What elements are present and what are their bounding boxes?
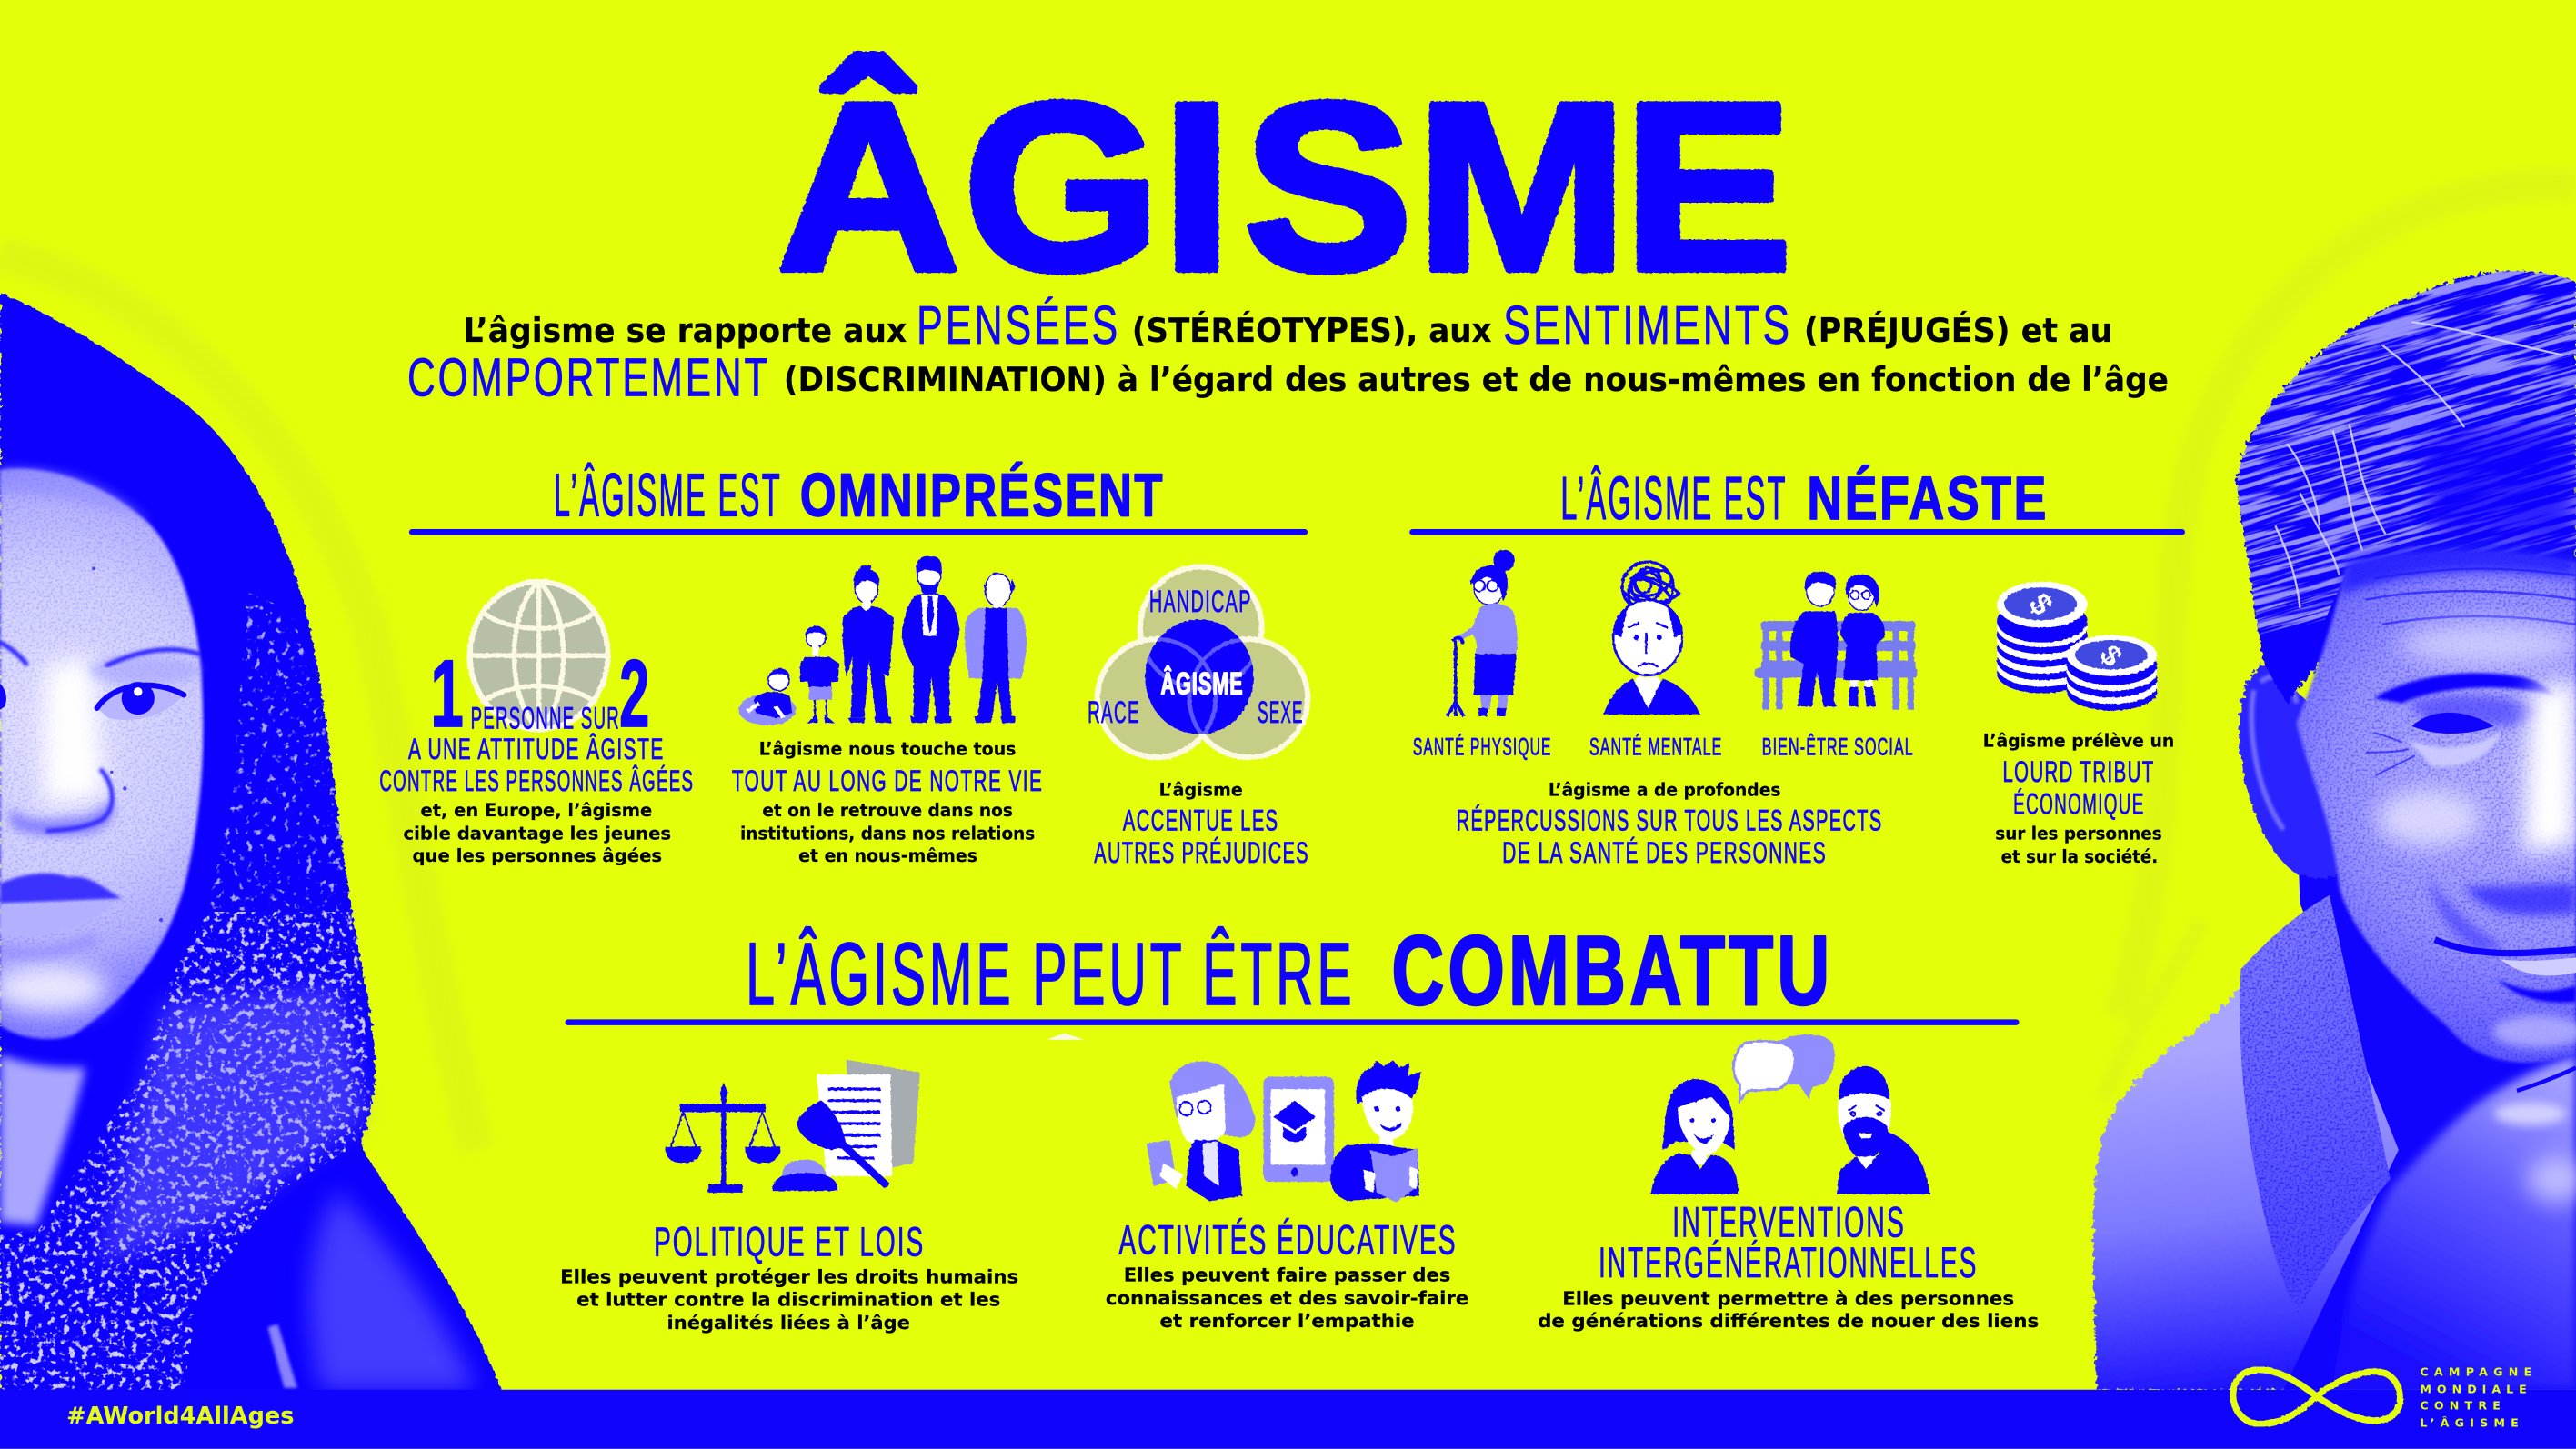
text: economic toll: LOURD TRIBUT (2002, 755, 2155, 788)
smile fold (2428, 877, 2504, 953)
heading: harmful: NÉFASTE (1807, 465, 2049, 533)
eye glint (134, 687, 142, 696)
health labels: SANTÉ MENTALE (1589, 732, 1722, 760)
text: lifelong (732, 738, 1043, 866)
text: intersects other prejudices (1094, 780, 1309, 869)
text: profound impact: L’âgisme a de profondes (1549, 780, 1781, 801)
stat: 1 person in 2: que les personnes âgées (412, 845, 662, 866)
health labels: BIEN-ÊTRE SOCIAL (1762, 732, 1914, 760)
heading: omnipresent: OMNIPRÉSENT (800, 462, 1165, 530)
column: educational activities: Elles peuvent faire passer des (1124, 1264, 1450, 1285)
stat: 1 person in 2: 2 (619, 641, 652, 747)
left eye fragment (0, 684, 6, 710)
nose wing outline (46, 769, 112, 831)
venn diagram: ÂGISME (1160, 665, 1244, 702)
baby (738, 668, 796, 725)
eye socket shade (89, 655, 200, 685)
jacket sheen (309, 1191, 476, 1390)
scarf sheen (98, 985, 365, 1264)
gavel (772, 1101, 887, 1191)
text: lifelong: et on le retrouve dans nos (762, 800, 1013, 821)
text: intersects other prejudices: AUTRES PRÉJUDICES (1094, 836, 1309, 869)
stat: 1 person in 2: cible davantage les jeunes (404, 823, 671, 844)
under-nose shadow (10, 798, 115, 836)
lapel (2240, 895, 2391, 1314)
title: ÂGISME (777, 52, 1792, 321)
column: policy and law: Elles peuvent protéger les droits humains (560, 1265, 1018, 1287)
hair dark crown shade (2415, 423, 2576, 550)
intro text block: COMPORTEMENT (407, 347, 770, 408)
text: lifelong: L’âgisme nous touche tous (759, 738, 1016, 759)
column: intergenerational interventions: Elles peuvent permettre à des personnes (1562, 1288, 2014, 1310)
intro text block: (DISCRIMINATION) à l’égard des autres et de nous-mêmes en fonction de l’âge (784, 360, 2169, 399)
icon: scales and gavel (666, 1060, 920, 1193)
eyebrow (2374, 673, 2556, 704)
icon: coin stacks: $ (2021, 586, 2060, 623)
campaign logo: infinity (2233, 1370, 2401, 1424)
text: lifelong: TOUT AU LONG DE NOTRE VIE (732, 764, 1043, 797)
dark base under face and hand (2283, 559, 2576, 1390)
eye bag (2407, 733, 2501, 767)
crow's feet (2366, 733, 2415, 775)
heading: can be combated: L’ÂGISME PEUT ÊTRE (746, 924, 1356, 1024)
column: intergenerational interventions: de générations différentes de nouer des liens (1538, 1310, 2039, 1332)
ear rim (2251, 676, 2297, 830)
stat: 1 person in 2 (379, 641, 694, 866)
intro text block (407, 295, 2169, 408)
icon: coin stacks (1997, 582, 2157, 711)
footer band (0, 1390, 2576, 1449)
icon: physical health (1448, 550, 1518, 716)
campaign logo text: L’ÂGISME (2420, 1415, 2519, 1429)
lavender speech bubble (1768, 1034, 1835, 1099)
text: economic toll: et sur la société. (2001, 846, 2158, 867)
intro text block: PENSÉES (917, 295, 1120, 355)
finger shadow (2517, 1068, 2576, 1091)
icon: education people (1147, 1060, 1421, 1203)
portrait: young woman with scarf (0, 293, 503, 1393)
mouth line (2435, 940, 2576, 954)
collar highlight (268, 1324, 297, 1388)
column: educational activities: connaissances et des savoir-faire (1106, 1287, 1468, 1309)
campaign logo text: MONDIALE (2420, 1382, 2527, 1395)
intro text block: SENTIMENTS (1503, 295, 1792, 355)
stat: 1 person in 2: et, en Europe, l’âgisme (421, 800, 652, 821)
column: intergenerational interventions: INTERVENTIONS (1672, 1198, 1906, 1246)
text: profound impact: DE LA SANTÉ DES PERSONNES (1502, 836, 1827, 869)
eyebrows (0, 643, 199, 665)
stat: 1 person in 2: 1 (430, 641, 466, 747)
venn diagram: RACE (1088, 695, 1140, 730)
text: profound impact (1457, 780, 1883, 869)
health labels (1413, 732, 1914, 760)
hand highlight (2527, 1156, 2576, 1203)
lower lip shadow (2497, 979, 2576, 1003)
column: policy and law: inégalités liées à l’âge (667, 1312, 910, 1334)
lapel weave (2240, 895, 2391, 1314)
brow shade (2407, 695, 2546, 726)
venn diagram (1088, 567, 1308, 757)
column: educational activities: ACTIVITÉS ÉDUCATIVES (1118, 1217, 1458, 1264)
teeth (2501, 958, 2576, 975)
column: intergenerational interventions: INTERGÉNÉRATIONNELLES (1599, 1238, 1978, 1286)
intro text block: (STÉRÉOTYPES), aux (1132, 311, 1492, 350)
hand (2333, 1054, 2576, 1390)
back page (846, 1060, 920, 1176)
face (0, 469, 203, 1039)
text: economic toll (1983, 730, 2174, 867)
neck (0, 1054, 85, 1225)
woman (1651, 1079, 1739, 1194)
icon: people of all ages (738, 556, 1027, 725)
column: educational activities: et renforcer l’empathie (1160, 1310, 1415, 1332)
young man (843, 565, 894, 723)
child (800, 626, 839, 723)
hair strands (2237, 271, 2576, 635)
nose highlight (2521, 677, 2576, 854)
campaign logo text: CAMPAGNE (2420, 1364, 2531, 1378)
icon: globe (470, 582, 608, 729)
icon: social wellbeing (1755, 572, 1917, 710)
upper lip (0, 874, 122, 904)
ear (2239, 664, 2342, 878)
hair, scarf and jacket silhouette (0, 293, 503, 1393)
suited man (902, 556, 959, 723)
hashtag: #AWorld4AllAges (66, 1403, 294, 1430)
forehead lines (2366, 569, 2576, 625)
heading: omnipresent: L’ÂGISME EST (554, 462, 782, 530)
campaign logo text: CONTRE (2420, 1398, 2501, 1412)
icon: coin stacks: $ (2093, 639, 2129, 673)
icon: intergenerational conversation (1651, 1034, 1930, 1194)
lower lip (0, 902, 115, 936)
forehead light (2399, 623, 2576, 665)
text: lifelong: institutions, dans nos relations (740, 823, 1035, 844)
text: profound impact: RÉPERCUSSIONS SUR TOUS LES ASPECTS (1457, 804, 1883, 837)
nasal shadow (2464, 884, 2576, 915)
text: economic toll: L’âgisme prélève un (1983, 730, 2174, 751)
white speech bubble (1734, 1041, 1795, 1101)
bearded man (1837, 1066, 1930, 1194)
lip shadow (0, 933, 98, 959)
cheek highlight (2376, 788, 2481, 848)
portrait: older man (2093, 190, 2576, 1390)
forehead shade (0, 466, 151, 523)
hairline shade (2340, 543, 2576, 595)
old man (965, 574, 1027, 723)
freckles (92, 567, 163, 922)
grey temple strands (2275, 322, 2563, 608)
column: policy and law: POLITIQUE ET LOIS (654, 1218, 925, 1264)
text: lifelong: et en nous-mêmes (798, 845, 977, 866)
column: policy and law: et lutter contre la discrimination et les (576, 1289, 1000, 1311)
stat: 1 person in 2: CONTRE LES PERSONNES ÂGÉES (379, 764, 694, 797)
intro text block: L’âgisme se rapporte aux (464, 311, 907, 350)
face grain (2297, 551, 2576, 1063)
stat: 1 person in 2: A UNE ATTITUDE ÂGISTE (408, 733, 665, 765)
text: intersects other prejudices: L’âgisme (1159, 780, 1243, 801)
scarf texture (0, 912, 371, 1390)
knuckle highlights (2494, 1103, 2566, 1125)
campaign logo text (2420, 1364, 2531, 1429)
iris (122, 682, 155, 715)
upper eyelid (97, 685, 184, 708)
heading: harmful: L’ÂGISME EST (1560, 465, 1788, 533)
woman reading phone (1147, 1062, 1256, 1201)
hair texture (205, 592, 352, 920)
tablet (1263, 1077, 1334, 1182)
face (2297, 551, 2576, 1063)
venn diagram: SEXE (1258, 695, 1304, 730)
heading: can be combated: COMBATTU (1391, 915, 1833, 1025)
eye white (97, 685, 184, 720)
icon: mental health (1603, 562, 1700, 715)
column: intergenerational interventions (1538, 1198, 2039, 1332)
stat: 1 person in 2: PERSONNE SUR (471, 702, 620, 736)
intro text block: (PRÉJUGÉS) et au (1804, 311, 2112, 350)
text: economic toll: ÉCONOMIQUE (2013, 787, 2145, 820)
document (817, 1074, 892, 1176)
venn diagram: HANDICAP (1149, 585, 1252, 619)
jacket (2093, 897, 2431, 1390)
face grain (0, 469, 203, 1039)
hair (2238, 271, 2576, 704)
column: educational activities (1106, 1217, 1468, 1332)
eye (2411, 713, 2494, 734)
column: policy and law (560, 1218, 1018, 1334)
boy with book (1330, 1060, 1421, 1203)
nose highlight (43, 657, 105, 805)
text: economic toll: sur les personnes (1995, 823, 2162, 844)
health labels: SANTÉ PHYSIQUE (1413, 732, 1551, 760)
scales (666, 1083, 780, 1193)
text: intersects other prejudices: ACCENTUE LES (1123, 804, 1279, 837)
brush texture around portraits (0, 184, 2576, 1150)
chin highlight (0, 964, 108, 1014)
chin highlight (2492, 1015, 2576, 1048)
